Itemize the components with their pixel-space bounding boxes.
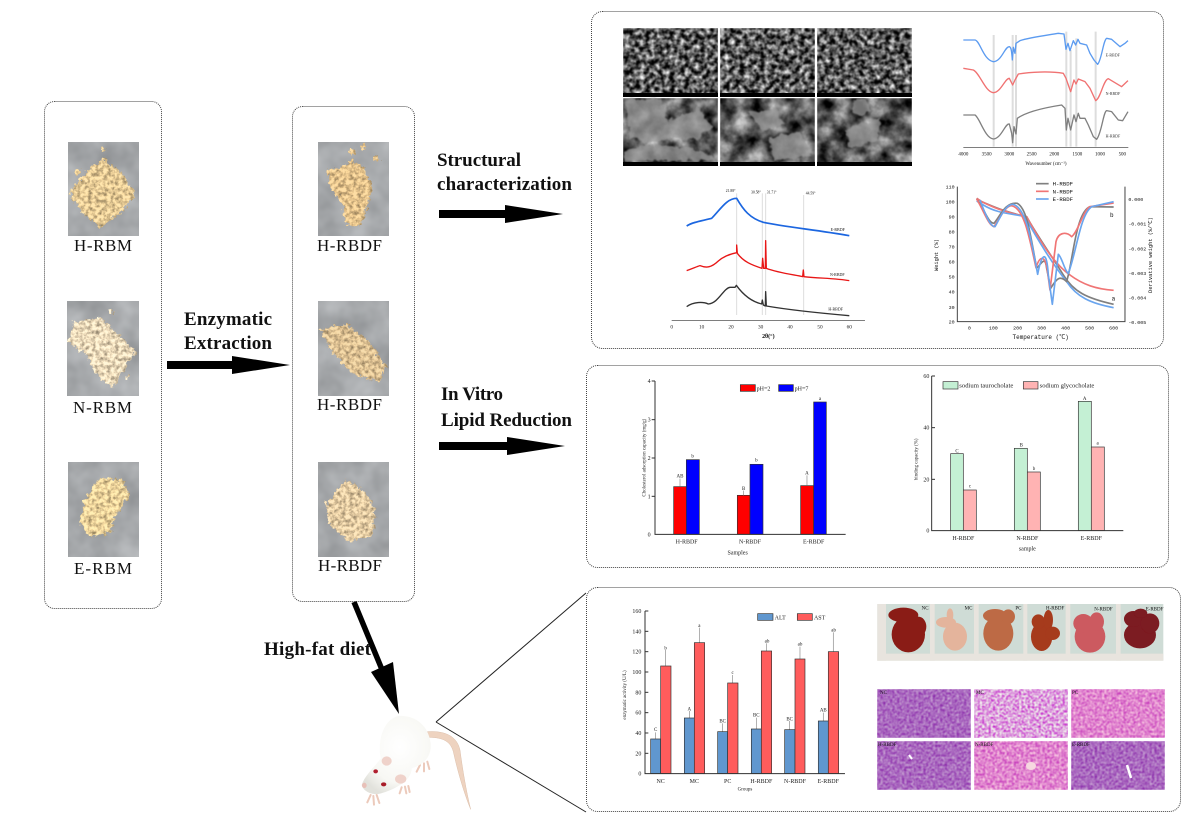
chart: cholesterol adsorption capacity: H-RBDF	[676, 539, 698, 545]
chart: cholesterol adsorption capacity: b	[755, 459, 758, 464]
chart: XRD patterns: 2θ(°)	[762, 333, 775, 340]
chart: XRD patterns: 50	[817, 325, 823, 331]
photo strip: whole livers: E-RBDF	[1146, 608, 1164, 613]
chart: XRD patterns: 10	[699, 325, 705, 331]
photo: H-RBDF first	[318, 142, 389, 236]
chart: ALT and AST enzymatic activity: 60	[635, 711, 641, 717]
chart: bile salt binding capacity: N-RBDF	[1016, 536, 1039, 542]
chart: bile salt binding capacity: 40	[923, 426, 929, 432]
chart: thermogravimetric curves: 30	[949, 305, 955, 311]
chart: XRD patterns: 44.59°	[806, 192, 816, 196]
chart: ALT and AST enzymatic activity: c	[732, 671, 735, 676]
chart: ALT and AST enzymatic activity: 80	[635, 690, 641, 696]
chart: FTIR spectra: 500	[1119, 152, 1127, 157]
chart: ALT and AST enzymatic activity: BC	[786, 717, 794, 722]
chart: ALT and AST enzymatic activity: ab	[765, 639, 770, 644]
chart: thermogravimetric curves: N-RBDF	[1053, 188, 1073, 195]
chart: bile salt binding capacity: E-RBDF	[1081, 536, 1103, 542]
chart: thermogravimetric curves: 100	[946, 200, 955, 206]
panel: extracted fibres	[292, 106, 414, 602]
chart: cholesterol adsorption capacity: b	[691, 455, 694, 460]
label: N-RBM: N-RBM	[73, 398, 132, 417]
chart: ALT and AST enzymatic activity: N-RBDF	[784, 779, 807, 785]
chart: thermogravimetric curves: -0.002	[1128, 246, 1146, 252]
chart: ALT and AST enzymatic activity: Groups	[738, 787, 752, 792]
chart: thermogravimetric curves: -0.005	[1128, 320, 1146, 326]
photo strip: whole livers: N-RBDF	[1094, 608, 1113, 613]
heading: enzymatic extraction: Extraction	[184, 333, 272, 354]
chart: thermogravimetric curves: 50	[949, 275, 955, 281]
chart: FTIR spectra: 3000	[1004, 152, 1015, 157]
chart: XRD patterns: 21.88°	[726, 189, 736, 193]
histology micrographs: H-RBDF	[878, 743, 897, 748]
chart: thermogravimetric curves: 90	[949, 215, 955, 221]
chart: bile salt binding capacity: 0	[926, 529, 929, 535]
chart: ALT and AST enzymatic activity: 120	[632, 650, 641, 656]
chart: bile salt binding capacity: 60	[923, 374, 929, 380]
chart: thermogravimetric curves: -0.004	[1128, 296, 1146, 302]
chart: bile salt binding capacity: sodium glycocholate	[1040, 383, 1095, 389]
chart: ALT and AST enzymatic activity: enzymatic activity (U/L)	[623, 670, 628, 720]
chart: ALT and AST enzymatic activity: 100	[632, 670, 641, 676]
chart: ALT and AST enzymatic activity: PC	[724, 779, 731, 785]
panel: in vitro lipid reduction	[586, 366, 1168, 568]
chart: bile salt binding capacity: binding capacity (%)	[914, 438, 919, 480]
label: H-RBDF third: H-RBDF	[318, 556, 382, 575]
chart: cholesterol adsorption capacity: Cholesterol adsorption capacity (mg/g)	[642, 418, 647, 497]
panel: in vivo results	[586, 588, 1180, 812]
chart: ALT and AST enzymatic activity: 140	[632, 629, 641, 635]
chart: cholesterol adsorption capacity: pH=2	[757, 386, 770, 392]
chart: thermogravimetric curves: 100	[989, 326, 998, 332]
histology micrographs: N-RBDF	[975, 743, 994, 748]
chart: ALT and AST enzymatic activity: H-RBDF	[750, 779, 773, 785]
photo strip: whole livers	[877, 604, 1164, 661]
chart: FTIR spectra: 1000	[1095, 152, 1105, 157]
chart: bile salt binding capacity: B	[1020, 443, 1024, 448]
chart: ALT and AST enzymatic activity: a	[698, 624, 701, 629]
photo: N-RBM powder	[67, 301, 139, 396]
chart: bile salt binding capacity: c	[969, 485, 972, 490]
arrow: to lipid reduction	[439, 437, 565, 455]
photo: H-RBM powder	[68, 142, 139, 236]
chart: bile salt binding capacity: sample	[1019, 547, 1036, 553]
histology micrographs: E-RBDF	[1072, 743, 1090, 748]
chart: thermogravimetric curves: 70	[949, 245, 955, 251]
chart: FTIR spectra: 3500	[982, 152, 992, 157]
icon: white mouse	[362, 716, 471, 809]
chart: thermogravimetric curves: 300	[1037, 326, 1046, 332]
chart: thermogravimetric curves: 40	[949, 290, 955, 296]
histology micrographs	[877, 689, 1165, 790]
chart: XRD patterns: 31.71°	[767, 190, 777, 194]
chart: ALT and AST enzymatic activity: BC	[719, 719, 727, 724]
chart: XRD patterns: 60	[847, 325, 852, 331]
photo strip: whole livers: H-RBDF	[1046, 606, 1064, 611]
chart: ALT and AST enzymatic activity: C	[654, 728, 658, 733]
histology micrographs: PC	[1072, 691, 1079, 696]
chart: XRD patterns: N-RBDF	[830, 272, 845, 277]
chart: bile salt binding capacity: A	[1083, 397, 1087, 402]
heading: in vitro lipid reduction: Lipid Reduction	[441, 410, 572, 431]
chart: ALT and AST enzymatic activity: b	[664, 646, 667, 651]
chart: cholesterol adsorption capacity	[642, 379, 846, 557]
chart: cholesterol adsorption capacity: N-RBDF	[739, 539, 762, 545]
chart: ALT and AST enzymatic activity: ALT	[775, 615, 786, 621]
label: E-RBM: E-RBM	[74, 559, 132, 578]
chart: thermogravimetric curves: 110	[946, 185, 955, 191]
chart: bile salt binding capacity: C	[955, 449, 959, 454]
heading: structural characterization: Structural	[437, 150, 521, 171]
chart: ALT and AST enzymatic activity: 0	[638, 772, 641, 778]
chart: thermogravimetric curves: 200	[1013, 326, 1022, 332]
chart: cholesterol adsorption capacity: 3	[648, 418, 651, 424]
chart: cholesterol adsorption capacity: 4	[648, 379, 651, 385]
chart: XRD patterns: 40	[787, 325, 793, 331]
chart: FTIR spectra	[958, 32, 1128, 167]
chart: bile salt binding capacity: a	[1097, 441, 1100, 446]
chart: ALT and AST enzymatic activity: MC	[690, 779, 699, 785]
arrow: high-fat diet	[354, 602, 399, 714]
photo strip: whole livers: NC	[922, 606, 929, 611]
chart: FTIR spectra: H-RBDF	[1106, 133, 1121, 138]
chart: ALT and AST enzymatic activity: ab	[831, 628, 836, 633]
chart: cholesterol adsorption capacity: A	[805, 471, 809, 476]
chart: ALT and AST enzymatic activity: ab	[798, 643, 803, 648]
arrow: to structural characterization	[439, 205, 563, 223]
chart: ALT and AST enzymatic activity	[623, 609, 845, 792]
chart: cholesterol adsorption capacity: a	[819, 397, 822, 402]
chart: thermogravimetric curves: Temperature (℃)	[1013, 334, 1069, 341]
chart: ALT and AST enzymatic activity: AB	[820, 708, 827, 713]
chart: thermogravimetric curves: 500	[1085, 326, 1094, 332]
callout lines	[436, 593, 586, 812]
chart: thermogravimetric curves: -0.003	[1128, 271, 1146, 277]
chart: cholesterol adsorption capacity: AB	[677, 475, 684, 480]
chart: bile salt binding capacity	[914, 374, 1123, 553]
photo: E-RBM powder	[68, 462, 139, 557]
chart: cholesterol adsorption capacity: 1	[648, 494, 651, 500]
photo strip: whole livers: MC	[965, 606, 973, 611]
chart: FTIR spectra: 4000	[958, 152, 969, 157]
chart: thermogravimetric curves	[934, 181, 1154, 341]
chart: thermogravimetric curves: Weight (%)	[934, 239, 940, 271]
SEM images	[623, 28, 912, 166]
chart: ALT and AST enzymatic activity: AST	[814, 615, 826, 621]
chart: XRD patterns: 30	[758, 325, 764, 331]
chart: bile salt binding capacity: H-RBDF	[952, 536, 975, 542]
heading: in vitro lipid reduction: In Vitro	[441, 384, 503, 405]
chart: thermogravimetric curves: -0.001	[1128, 222, 1146, 228]
chart: thermogravimetric curves: b	[1110, 212, 1114, 219]
chart: FTIR spectra: E-RBDF	[1106, 53, 1121, 58]
chart: thermogravimetric curves: 600	[1109, 326, 1118, 332]
chart: thermogravimetric curves: 80	[949, 230, 955, 236]
chart: ALT and AST enzymatic activity: E-RBDF	[818, 779, 840, 785]
chart: thermogravimetric curves: 400	[1061, 326, 1070, 332]
chart: ALT and AST enzymatic activity: 40	[635, 731, 641, 737]
chart: thermogravimetric curves: 0.000	[1128, 197, 1143, 203]
chart: ALT and AST enzymatic activity: 20	[635, 751, 641, 757]
panel: raw materials	[44, 102, 162, 608]
chart: XRD patterns: H-RBDF	[828, 307, 844, 312]
chart: XRD patterns	[670, 189, 865, 340]
chart: FTIR spectra: 2000	[1049, 152, 1060, 157]
chart: cholesterol adsorption capacity: 0	[648, 532, 651, 538]
chart: bile salt binding capacity: sodium taurocholate	[959, 383, 1014, 389]
chart: XRD patterns: 30.58°	[751, 190, 761, 194]
chart: thermogravimetric curves: 0	[968, 326, 971, 332]
chart: ALT and AST enzymatic activity: A	[688, 707, 692, 712]
histology micrographs: MC	[976, 691, 984, 696]
heading: high-fat diet: High-fat diet	[264, 639, 372, 660]
chart: XRD patterns: 0	[670, 325, 673, 331]
heading: structural characterization: characterization	[437, 174, 572, 195]
chart: thermogravimetric curves: E-RBDF	[1053, 196, 1073, 203]
photo strip: whole livers: PC	[1015, 606, 1022, 611]
chart: XRD patterns: E-RBDF	[831, 227, 846, 232]
chart: ALT and AST enzymatic activity: BC	[753, 713, 760, 718]
chart: thermogravimetric curves: 60	[949, 260, 955, 266]
chart: FTIR spectra: 2500	[1027, 152, 1037, 157]
chart: thermogravimetric curves: 20	[949, 320, 955, 326]
chart: bile salt binding capacity: 20	[923, 477, 929, 483]
chart: cholesterol adsorption capacity: pH=7	[795, 386, 808, 392]
photo: H-RBDF third	[318, 462, 389, 557]
histology micrographs: NC	[880, 691, 888, 696]
label: H-RBDF first: H-RBDF	[317, 236, 382, 255]
label: H-RBDF second: H-RBDF	[317, 395, 382, 414]
arrow: enzymatic extraction	[167, 356, 290, 374]
chart: thermogravimetric curves: a	[1112, 295, 1116, 302]
chart: cholesterol adsorption capacity: 2	[648, 456, 651, 462]
chart: cholesterol adsorption capacity: Samples	[728, 551, 748, 557]
chart: XRD patterns: 20	[728, 325, 734, 331]
chart: thermogravimetric curves: H-RBDF	[1053, 181, 1073, 188]
label: H-RBM: H-RBM	[74, 236, 132, 255]
chart: FTIR spectra: N-RBDF	[1106, 91, 1121, 96]
chart: FTIR spectra: 1500	[1072, 152, 1083, 157]
chart: cholesterol adsorption capacity: E-RBDF	[803, 539, 825, 545]
chart: bile salt binding capacity: b	[1033, 467, 1036, 472]
panel: structural characterization	[592, 12, 1164, 348]
chart: cholesterol adsorption capacity: B	[742, 487, 746, 492]
photo: H-RBDF second	[318, 301, 389, 396]
heading: enzymatic extraction: Enzymatic	[184, 309, 272, 330]
chart: thermogravimetric curves: Derivative weight (%/℃)	[1147, 217, 1154, 293]
chart: ALT and AST enzymatic activity: NC	[656, 779, 665, 785]
chart: ALT and AST enzymatic activity: 160	[632, 609, 641, 615]
chart: FTIR spectra: Wavenumber (cm⁻¹)	[1025, 161, 1067, 167]
